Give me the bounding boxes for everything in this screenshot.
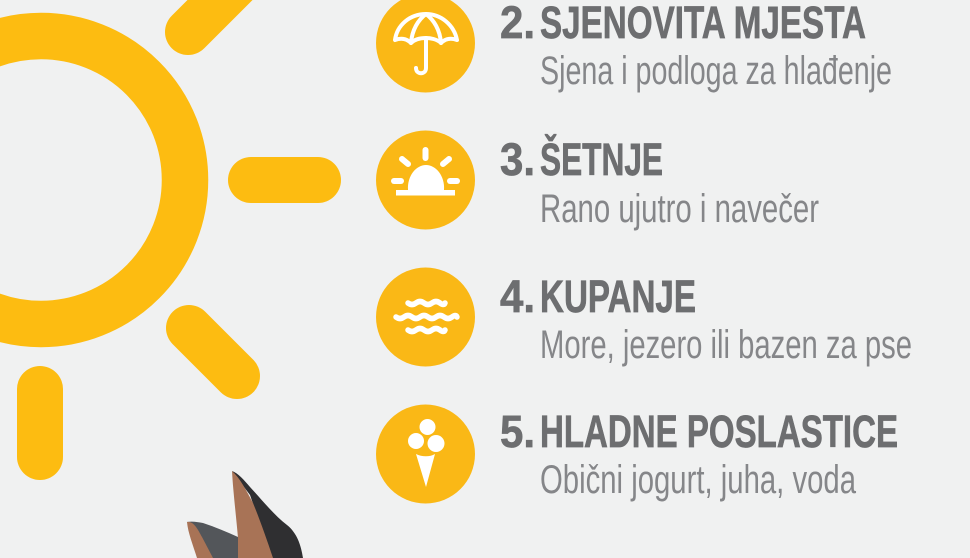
heading: ŠETNJE: [540, 134, 663, 185]
description: Rano ujutro i navečer: [540, 187, 819, 231]
heading: KUPANJE: [540, 271, 696, 322]
item 3: walks: [376, 130, 819, 231]
illustration: dog ears: [187, 471, 303, 558]
icon: sunrise: [376, 130, 475, 230]
item 5: cold treats: [376, 404, 898, 504]
number: 3.: [500, 134, 535, 185]
description: Obični jogurt, juha, voda: [540, 458, 857, 502]
icon: large sun: [0, 0, 318, 457]
icon: umbrella: [376, 0, 475, 92]
item 2: shady places: [376, 0, 892, 93]
icon: water waves: [376, 268, 475, 366]
icon: ice cream: [376, 404, 475, 504]
number: 4.: [500, 271, 535, 322]
number: 5.: [500, 406, 535, 457]
item 4: swimming: [376, 268, 912, 367]
